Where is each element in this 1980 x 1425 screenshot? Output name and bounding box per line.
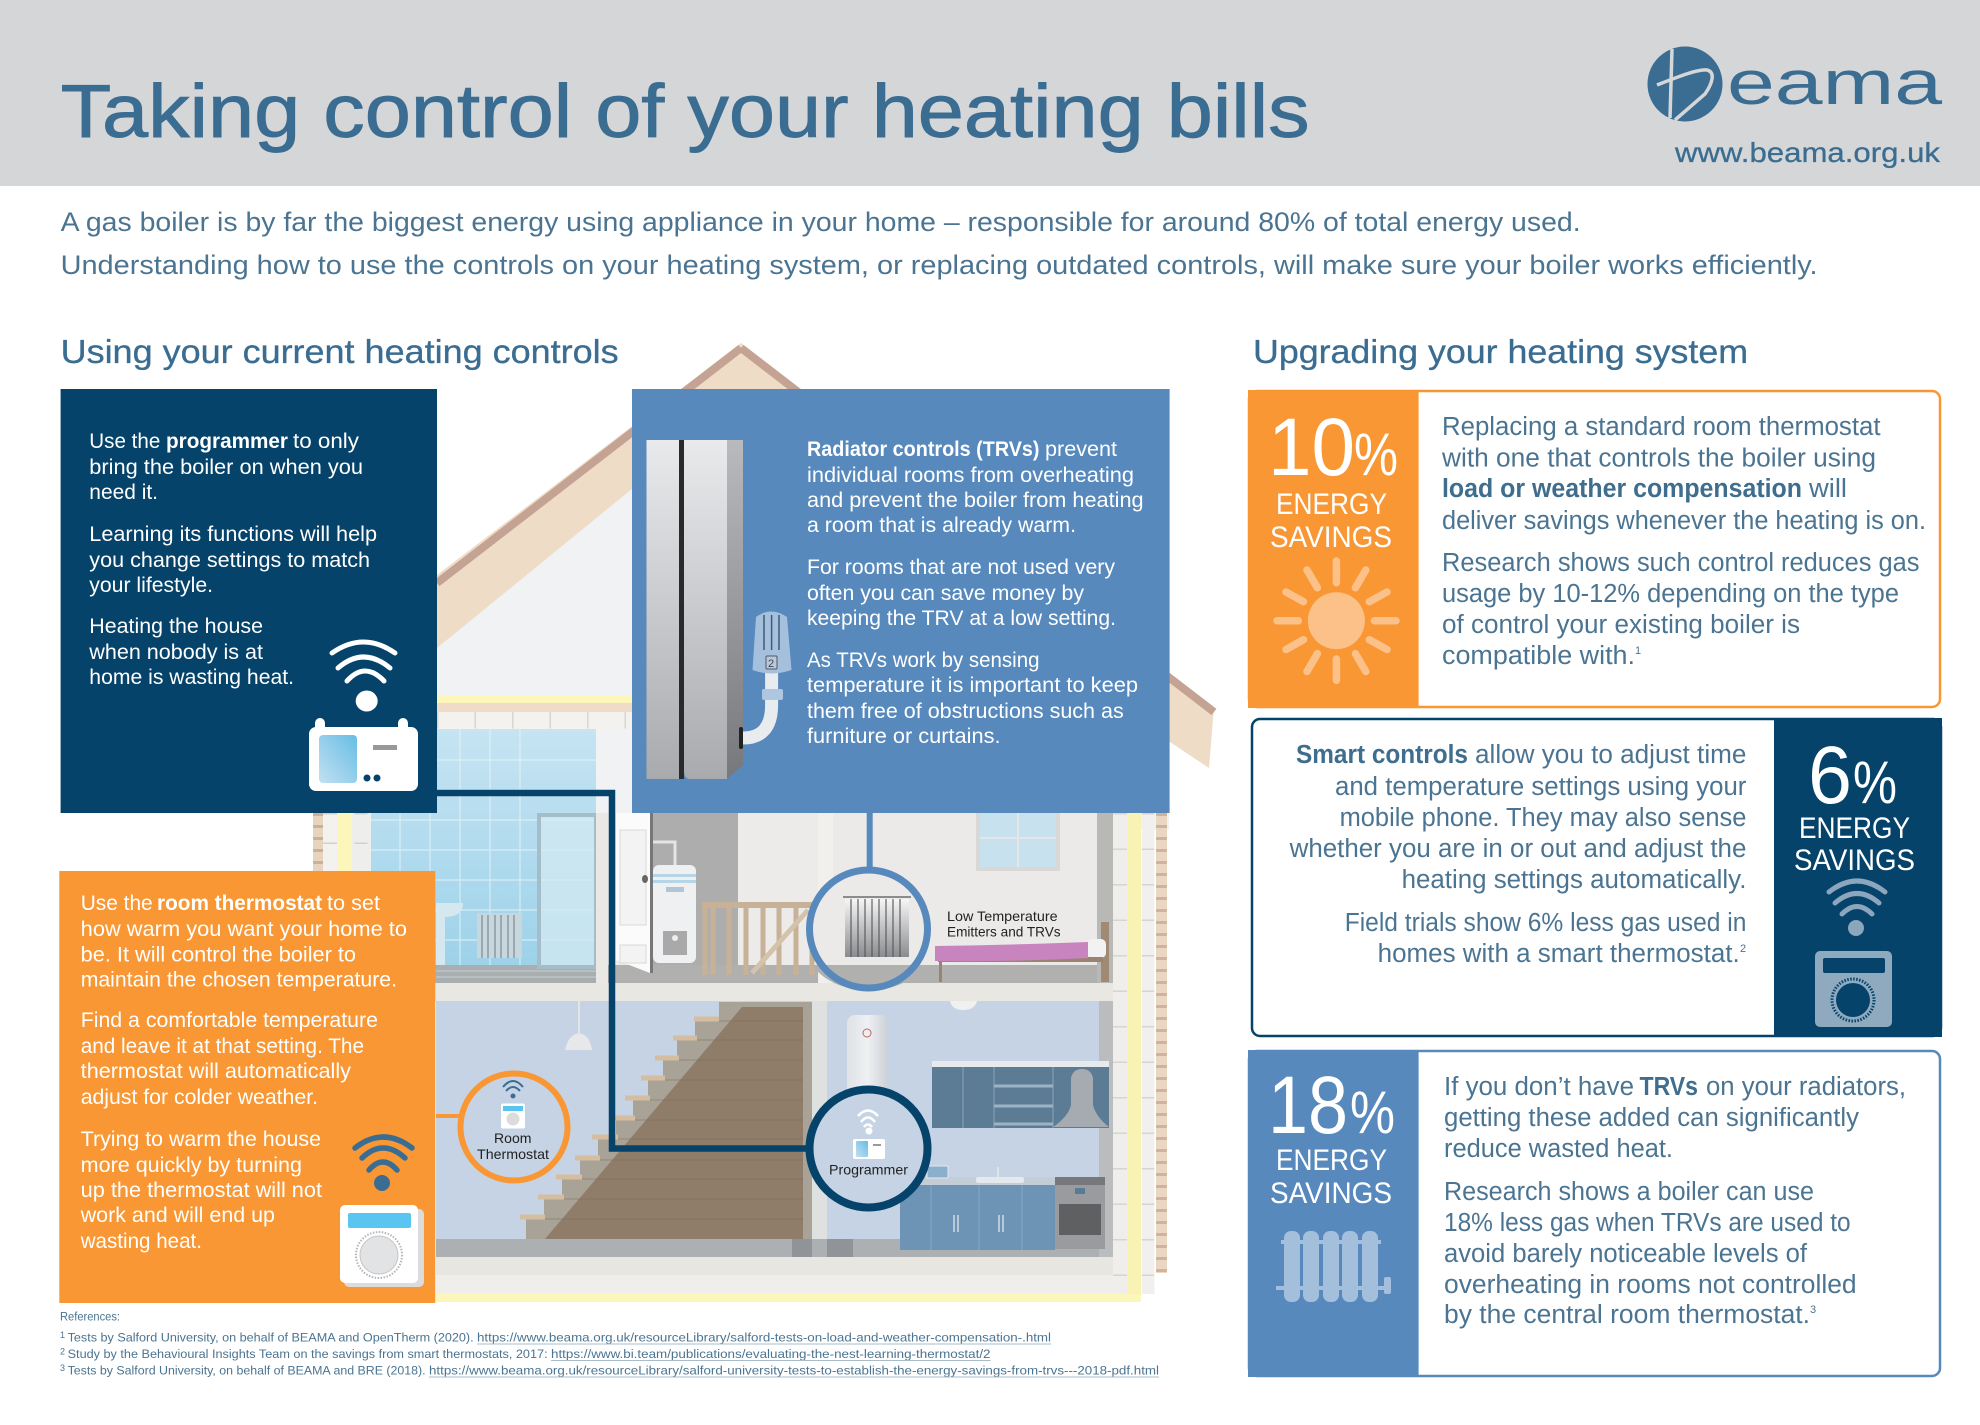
callout circle: room thermostat: Thermostat	[477, 1146, 549, 1162]
panel text: work and will end up	[80, 1203, 275, 1227]
panel: programmer	[61, 389, 437, 813]
body text: Smart controls	[1296, 741, 1468, 769]
panel text: often you can save money by	[807, 581, 1084, 605]
stat: 18	[1268, 1060, 1348, 1151]
body text: 3	[1810, 1304, 1816, 1316]
house illustration	[313, 343, 1214, 1302]
hot water cylinder	[653, 842, 696, 963]
body text: Replacing a standard room thermostat	[1442, 413, 1880, 441]
references: Tests by Salford University, on behalf of BEAMA and OpenTherm (2020).	[68, 1331, 474, 1345]
panel text: Use the	[81, 891, 153, 915]
panel text: bring the boiler on when you	[89, 455, 363, 479]
icon: sun	[1277, 561, 1396, 680]
body text: deliver savings whenever the heating is on.	[1442, 507, 1926, 535]
panel text: temperature it is important to keep	[807, 673, 1138, 697]
door	[616, 813, 653, 973]
window	[976, 813, 1060, 871]
stat: 10	[1268, 402, 1355, 493]
body text: overheating in rooms not controlled	[1444, 1271, 1857, 1299]
panel text: For rooms that are not used very	[807, 555, 1115, 579]
left wall	[313, 813, 371, 873]
callout circle: room thermostat: Room	[494, 1130, 532, 1146]
callout circle: radiator	[810, 870, 928, 989]
body text: Field trials show 6% less gas used in	[1345, 909, 1746, 937]
references: References:	[60, 1310, 120, 1324]
panel text: keeping the TRV at a low setting.	[807, 606, 1116, 630]
body text: avoid barely noticeable levels of	[1444, 1240, 1808, 1268]
callout circle: programmer: Programmer	[829, 1162, 908, 1178]
panel text: how warm you want your home to	[81, 917, 407, 941]
panel text: furniture or curtains.	[807, 724, 1000, 748]
oven	[1055, 1177, 1105, 1249]
stat: SAVINGS	[1794, 844, 1915, 877]
body text: getting these added can significantly	[1444, 1104, 1859, 1132]
references: 1	[60, 1330, 65, 1340]
references: https://www.beama.org.uk/resourceLibrary/salford-tests-on-load-and-weather-compensation-.html	[477, 1331, 1051, 1345]
heading: current controls: Using your current heating controls	[61, 333, 619, 370]
wall cabinets	[932, 1061, 1109, 1128]
panel text: to only	[293, 429, 359, 453]
panel text: thermostat will automatically	[81, 1059, 351, 1083]
title: Taking control of your heating bills	[61, 69, 1310, 153]
panel text: wasting heat.	[80, 1229, 202, 1253]
callout circle: room thermostat	[460, 1074, 568, 1180]
heading: upgrading: Upgrading your heating system	[1253, 333, 1748, 370]
wall thermostat	[927, 1166, 948, 1178]
roof	[437, 343, 1214, 830]
floor slabs	[371, 983, 1141, 1302]
stat	[1794, 730, 1915, 877]
panel text: adjust for colder weather.	[81, 1085, 318, 1109]
panel text: them free of obstructions such as	[807, 699, 1124, 723]
body text: of control your existing boiler is	[1442, 611, 1800, 639]
body text	[1441, 413, 1926, 670]
icon: radiator and TRV: 2	[768, 658, 774, 670]
connector: thermostat	[436, 1114, 460, 1118]
panel text: your lifestyle.	[89, 573, 213, 597]
panel text: maintain the chosen temperature.	[81, 968, 397, 992]
panel text: a room that is already warm.	[807, 513, 1076, 537]
icon: radiator	[1276, 1231, 1391, 1302]
header band	[0, 0, 1980, 186]
body text: compatible with.	[1442, 642, 1635, 670]
body text: Research shows such control reduces gas	[1442, 549, 1920, 577]
stat: SAVINGS	[1270, 521, 1392, 554]
stat	[1268, 402, 1398, 554]
panel: 18% energy savings	[1248, 1050, 1940, 1377]
body text: If you don’t have	[1444, 1073, 1634, 1101]
connector: radiator	[867, 813, 873, 870]
panel text: and prevent the boiler from heating	[807, 488, 1144, 512]
label: low temperature emitters	[947, 908, 1061, 939]
body text: homes with a smart thermostat.	[1378, 940, 1740, 968]
icon: thermostat	[1815, 951, 1892, 1027]
panel text: and leave it at that setting. The	[81, 1034, 364, 1058]
stat: ENERGY	[1276, 1144, 1387, 1177]
banister	[702, 905, 815, 975]
body text: TRVs	[1640, 1073, 1698, 1101]
body text: whether you are in or out and adjust the	[1289, 835, 1746, 863]
intro text: A gas boiler is by far the biggest energy using appliance in your home – responsible for around 80% of total energy used.	[61, 207, 1581, 237]
panel text: up the thermostat will not	[81, 1178, 322, 1202]
panel text: Heating the house	[89, 614, 263, 638]
label: low temperature emitters: Emitters and TRVs	[947, 923, 1061, 939]
callout circle: programmer	[810, 1090, 928, 1208]
bathroom radiator	[477, 913, 522, 958]
logo: beama	[1648, 46, 1943, 122]
panel text: room thermostat	[157, 891, 322, 915]
panel text: be. It will control the boiler to	[81, 943, 356, 967]
body text: by the central room thermostat.	[1444, 1301, 1810, 1329]
body text: usage by 10-12% depending on the type	[1442, 580, 1899, 608]
body text: heating settings automatically.	[1402, 866, 1746, 894]
panel text: Trying to warm the house	[81, 1127, 321, 1151]
logo: beama: eama	[1727, 49, 1943, 118]
panel text	[80, 891, 407, 1253]
panel: radiator controls	[632, 389, 1170, 813]
references: Tests by Salford University, on behalf of BEAMA and BRE (2018).	[68, 1364, 426, 1378]
body text: and temperature settings using your	[1335, 773, 1747, 801]
body text: 2	[1740, 943, 1746, 955]
body text: with one that controls the boiler using	[1441, 445, 1876, 473]
references: https://www.beama.org.uk/resourceLibrary/salford-university-tests-to-establish-the-energy-savings-from-trvs---2018-pdf.html	[429, 1364, 1159, 1378]
ceiling light	[950, 1001, 977, 1010]
icon: wifi	[332, 642, 395, 712]
body text: will	[1808, 475, 1847, 503]
panel text: Radiator controls (TRVs)	[807, 437, 1040, 461]
panel text: Learning its functions will help	[89, 522, 377, 546]
references	[60, 1310, 1159, 1378]
panel text: As TRVs work by sensing	[807, 648, 1040, 672]
landing and bedroom	[608, 813, 1113, 983]
panel text: individual rooms from overheating	[807, 463, 1134, 487]
icon: thermostat	[340, 1205, 424, 1287]
sink	[436, 903, 463, 965]
icon: wifi	[1829, 881, 1885, 936]
stat: 6	[1808, 730, 1852, 821]
stat	[1268, 1060, 1395, 1210]
icon: programmer	[309, 718, 418, 791]
panel text: more quickly by turning	[81, 1153, 302, 1177]
panel text: to set	[327, 891, 380, 915]
panel text: home is wasting heat.	[89, 665, 294, 689]
right wall	[1113, 813, 1167, 1302]
website: www.beama.org.uk	[1674, 137, 1941, 168]
hanging lamp	[565, 1001, 592, 1050]
panel text: programmer	[166, 429, 289, 453]
references: Study by the Behavioural Insights Team on the savings from smart thermostats, 2017:	[68, 1347, 548, 1361]
intro text	[61, 207, 1818, 280]
water heater	[847, 1015, 888, 1105]
body text	[1289, 741, 1747, 968]
stat: %	[1350, 1079, 1395, 1146]
panel: 6% energy savings	[1252, 718, 1942, 1037]
base cabinets	[900, 1167, 1055, 1250]
bed	[935, 922, 1109, 982]
label: low temperature emitters: Low Temperature	[947, 908, 1058, 924]
panel text: need it.	[89, 480, 158, 504]
panel text	[807, 437, 1144, 748]
panel: room thermostat	[59, 871, 435, 1303]
stat: SAVINGS	[1270, 1177, 1392, 1210]
intro text: Understanding how to use the controls on your heating system, or replacing outdated controls, will make sure your boiler works efficiently.	[61, 250, 1818, 280]
references: https://www.bi.team/publications/evaluating-the-nest-learning-thermostat/2	[551, 1347, 991, 1361]
shower	[539, 815, 596, 967]
body text: load or weather compensation	[1442, 475, 1802, 503]
references: 2	[60, 1346, 65, 1356]
panel text: when nobody is at	[88, 640, 263, 664]
panel text: prevent	[1045, 437, 1117, 461]
panel text	[88, 429, 377, 689]
icon: radiator and TRV	[646, 440, 792, 779]
panel text: Use the	[89, 429, 160, 453]
panel: 10% energy savings	[1248, 390, 1940, 708]
stat: ENERGY	[1799, 812, 1910, 845]
body text: mobile phone. They may also sense	[1340, 804, 1746, 832]
body text	[1444, 1073, 1906, 1329]
body text: allow you to adjust time	[1475, 741, 1746, 769]
body text: 18% less gas when TRVs are used to	[1444, 1209, 1851, 1237]
bathroom	[371, 729, 608, 983]
references: 3	[60, 1363, 65, 1373]
stat: %	[1853, 749, 1897, 816]
body text: Research shows a boiler can use	[1444, 1178, 1814, 1206]
stat: ENERGY	[1276, 488, 1387, 521]
panel text: you change settings to match	[89, 548, 370, 572]
stat: %	[1354, 421, 1398, 488]
body text: 1	[1635, 645, 1641, 657]
body text: on your radiators,	[1706, 1073, 1906, 1101]
ground floor	[436, 1001, 1113, 1257]
icon: wifi	[355, 1137, 412, 1191]
stairs	[520, 1002, 812, 1239]
body text: reduce wasted heat.	[1444, 1135, 1673, 1163]
panel text: Find a comfortable temperature	[81, 1008, 378, 1032]
connector: programmer	[437, 793, 810, 1148]
